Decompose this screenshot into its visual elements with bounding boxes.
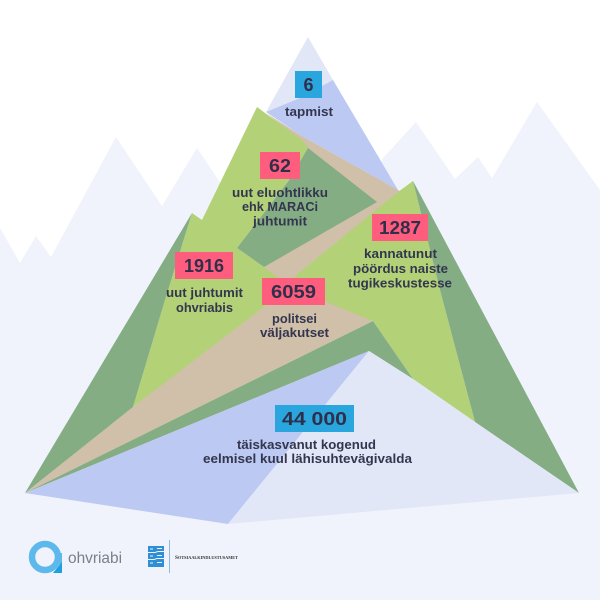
dark green lower strip: [25, 321, 413, 493]
tan band upper: [264, 113, 413, 310]
stat: 44 000 täiskasvanut: eelmisel kuul lähisuhtevägivalda: [203, 451, 413, 466]
stat: 44 000 täiskasvanut: [203, 405, 413, 466]
stat: 6059 politsei: 6059: [271, 282, 316, 302]
dark green right face: [413, 181, 579, 493]
stat: 62 uut eluohtlikku: ehk MARACi: [242, 199, 318, 214]
stat: 62 uut eluohtlikku: juhtumit: [252, 214, 308, 228]
lower shade: [25, 351, 369, 524]
stat: 1916 uut juhtumit: [166, 252, 244, 315]
dark green left face: [25, 213, 192, 493]
stat: 6059 politsei: väljakutset: [260, 325, 330, 340]
stat: 6 tapmist: 6: [304, 75, 314, 95]
stat: 62 uut eluohtlikku: uut eluohtlikku: [232, 185, 328, 200]
stat: 1287 kannatunut: kannatunut: [364, 246, 438, 261]
logo: ohvriabi: [32, 544, 122, 573]
summit shade: [266, 80, 398, 190]
stat: 6 tapmist: tapmist: [285, 104, 334, 119]
stat: 1287 kannatunut: 1287: [379, 218, 421, 238]
lower pale face: [228, 351, 579, 524]
light green right ridge: [285, 181, 475, 422]
stat: 6059 politsei: politsei: [272, 311, 317, 326]
tan band lower: [25, 285, 373, 493]
summit snow: [266, 37, 340, 120]
stat: 44 000 täiskasvanut: täiskasvanut kogenud: [237, 437, 376, 452]
stat: 1287 kannatunut: pöördus naiste: [353, 261, 448, 276]
icon: three lions crest: [148, 546, 164, 567]
stat: 1916 uut juhtumit: 1916: [184, 256, 224, 276]
mountain illustration: [25, 37, 579, 524]
stat: 62 uut eluohtlikku: [232, 152, 328, 228]
stat: 62 uut eluohtlikku: 62: [269, 156, 291, 176]
stat: 1916 uut juhtumit: ohvriabis: [176, 300, 233, 315]
stat: 1287 kannatunut: [348, 214, 452, 290]
dark green centre facet: [237, 148, 377, 267]
stat: 44 000 täiskasvanut: 44 000: [282, 409, 347, 429]
light green ridge centre: [133, 107, 308, 407]
stat: 6 tapmist: [285, 71, 334, 119]
logo: ohvriabi: ohvriabi: [68, 550, 122, 567]
stat: 1916 uut juhtumit: uut juhtumit: [166, 285, 244, 300]
stat: 6059 politsei: [260, 278, 330, 340]
logo: Sotsiaalkindlustusamet: [148, 540, 238, 573]
stat: 1287 kannatunut: tugikeskustesse: [348, 276, 452, 290]
logo: Sotsiaalkindlustusamet: Sotsiaalkindlustusamet: [175, 556, 238, 561]
